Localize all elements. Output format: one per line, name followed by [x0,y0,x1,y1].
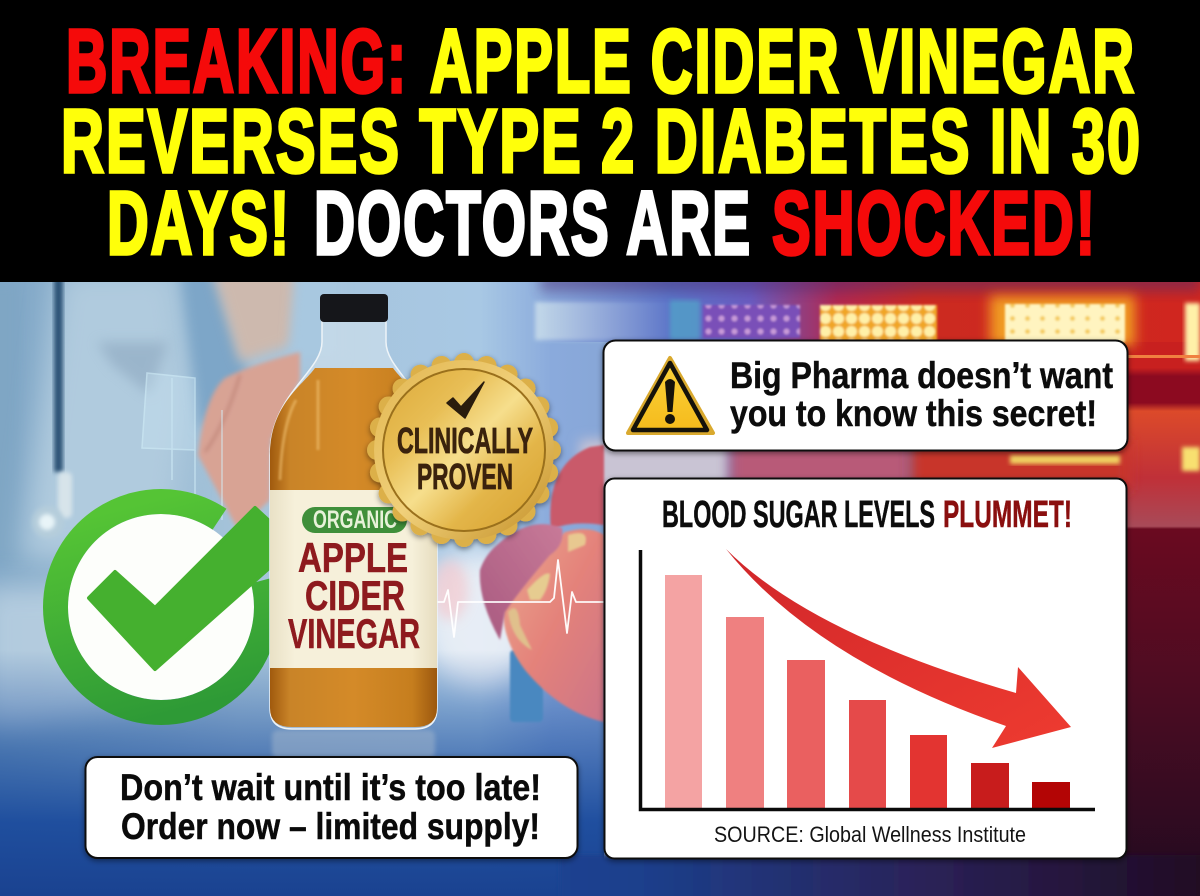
badge: clinically proven seal [374,360,554,540]
title line 1: BREAKING: [66,12,408,112]
callout: big pharma warning [604,340,1128,450]
bar chart [640,550,1095,810]
icon: warning triangle [628,358,713,433]
lower dark strip [560,855,1200,896]
vinegar liquid [270,368,437,727]
title line 3: DAYS! [107,174,291,274]
blurred photo background [0,270,1200,896]
title line 1 [66,12,1136,112]
fat patches [527,573,550,600]
product name [288,534,420,657]
doctor in white coat [0,282,298,736]
stethoscope [32,270,72,538]
seal text [397,420,533,497]
title banner [0,0,1200,282]
callout: order now: Order now – limited supply! [121,806,540,847]
icon: green check circle [32,478,295,736]
product name: CIDER [305,572,405,619]
title line 3: DOCTORS ARE [314,174,752,274]
bottle cap [320,294,388,322]
hologram glass [142,373,222,520]
aorta [550,445,604,530]
police lights [703,296,1200,361]
doctor's hand [198,352,300,530]
chart axes [640,550,1095,810]
product name: APPLE [298,534,408,581]
seal check mark [447,382,484,418]
warning text: Big Pharma doesn’t want [730,355,1113,396]
arrow: downward trend [726,549,1071,748]
callout: order now: Don’t wait until it’s too late! [120,767,541,808]
bottle glass [270,320,437,729]
lower blue fade [0,650,604,896]
light top block [535,302,670,340]
panel: blood sugar chart [604,478,1126,858]
seal text: CLINICALLY [397,420,533,461]
organic pill: ORGANIC [313,506,397,534]
chart title: BLOOD SUGAR LEVELS [662,494,935,536]
ventricle [503,529,604,722]
chart source: SOURCE: Global Wellness Institute [714,822,1026,847]
bottle label [270,490,437,668]
vena cava [510,650,543,722]
atrium [480,524,562,640]
callout: order now [86,757,578,858]
glass highlights [280,380,318,480]
warning text [730,355,1113,434]
warning text: you to know this secret! [730,393,1097,434]
ecg line [437,560,604,637]
bottle reflection [272,730,435,758]
police car backdrop [540,270,1200,896]
chart title: PLUMMET! [943,494,1072,536]
product name: VINEGAR [288,610,420,657]
seal text: PROVEN [417,456,513,497]
light glow behind bottle [438,538,514,701]
bottle [270,294,437,758]
icon: anatomical heart [480,445,604,722]
